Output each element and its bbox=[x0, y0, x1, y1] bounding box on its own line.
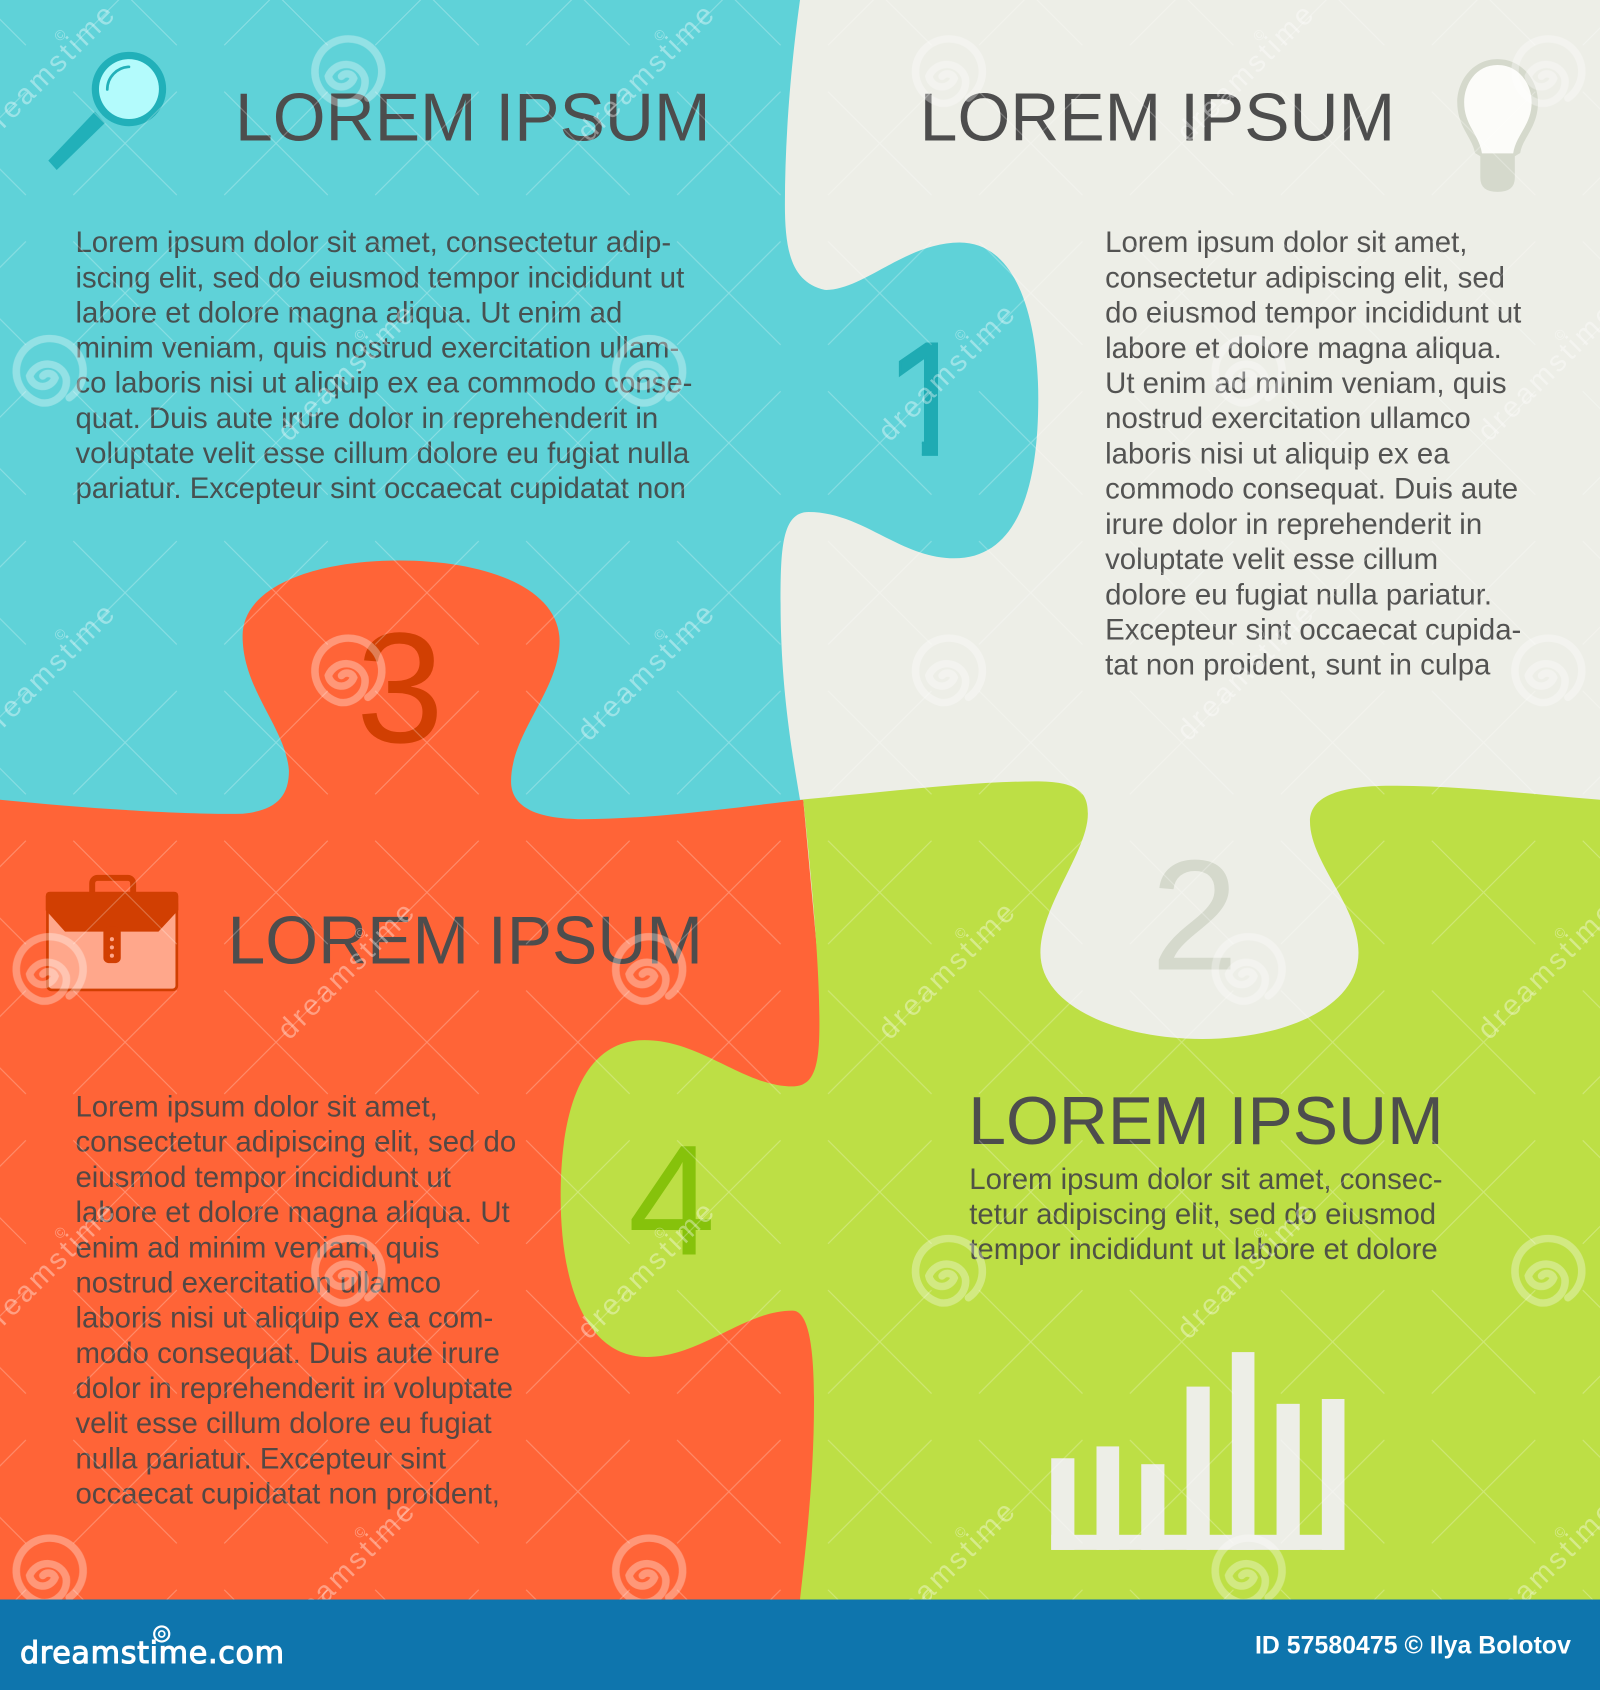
text block 2: dolore eu fugiat nulla pariatur. bbox=[1105, 578, 1492, 611]
text block 3: consectetur adipiscing elit, sed do bbox=[75, 1126, 516, 1159]
number 3: 3 bbox=[356, 601, 444, 776]
watermark overlay: dreamstime bbox=[1171, 1196, 1320, 1345]
watermark overlay: dreamstime bbox=[571, 598, 721, 747]
text block 4: tetur adipiscing elit, sed do eiusmod bbox=[969, 1198, 1436, 1231]
watermark overlay: dreamstime bbox=[1171, 598, 1320, 747]
watermark overlay: © bbox=[650, 625, 669, 644]
text block 4: tempor incididunt ut labore et dolore bbox=[969, 1233, 1438, 1266]
text block 3: laboris nisi ut aliquip ex ea com- bbox=[75, 1302, 493, 1335]
watermark overlay: © bbox=[51, 1223, 70, 1242]
icon: briefcase bbox=[46, 878, 178, 990]
watermark overlay: © bbox=[51, 25, 70, 44]
number 2: 2 bbox=[1151, 829, 1238, 1003]
icon: light bulb bbox=[1457, 59, 1538, 192]
panel: red piece 3 bbox=[0, 560, 825, 1599]
text block 1: voluptate velit esse cillum dolore eu fugiat nulla bbox=[75, 437, 690, 470]
watermark overlay: © bbox=[1550, 1522, 1569, 1541]
text block 2: laboris nisi ut aliquip ex ea bbox=[1105, 437, 1450, 470]
text block 4 bbox=[969, 1163, 1443, 1266]
text block 1: pariatur. Excepteur sint occaecat cupidatat non bbox=[75, 472, 686, 505]
text block 2: Lorem ipsum dolor sit amet, bbox=[1105, 226, 1467, 259]
text block 1: quat. Duis aute irure dolor in reprehenderit in bbox=[75, 402, 658, 435]
watermark overlay: dreamstime bbox=[272, 298, 421, 448]
watermark overlay: © bbox=[350, 325, 369, 344]
footer logo: dreamstime.com bbox=[20, 1636, 284, 1671]
watermark overlay: dreamstime bbox=[872, 897, 1021, 1046]
text block 3 bbox=[75, 1091, 516, 1511]
watermark overlay: dreamstime bbox=[872, 1496, 1021, 1645]
number 4: 4 bbox=[628, 1114, 715, 1289]
text block 2: consectetur adipiscing elit, sed bbox=[1105, 261, 1505, 294]
text block 2: commodo consequat. Duis aute bbox=[1105, 473, 1518, 506]
text block 2 bbox=[1105, 226, 1521, 682]
heading 1: LOREM IPSUM bbox=[235, 81, 711, 156]
number 1: 1 bbox=[884, 310, 974, 490]
text block 1 bbox=[75, 226, 692, 505]
text block 2: Ut enim ad minim veniam, quis bbox=[1105, 367, 1507, 400]
text block 2: nostrud exercitation ullamco bbox=[1105, 402, 1471, 435]
text block 3: dolor in reprehenderit in voluptate bbox=[75, 1372, 513, 1405]
heading 2: LOREM IPSUM bbox=[920, 81, 1395, 156]
watermark overlay: © bbox=[1250, 1223, 1269, 1242]
watermark overlay: dreamstime bbox=[571, 0, 721, 148]
watermark overlay: © bbox=[1250, 25, 1269, 44]
footer credit: ID 57580475 © Ilya Bolotov bbox=[1255, 1632, 1571, 1659]
panel: cream piece 2 bbox=[755, 0, 1600, 1051]
text block 1: Lorem ipsum dolor sit amet, consectetur adip- bbox=[75, 226, 671, 259]
text block 3: enim ad minim veniam, quis bbox=[75, 1231, 439, 1264]
watermark overlay: © bbox=[1550, 923, 1569, 942]
watermark overlay: dreamstime bbox=[272, 1496, 421, 1645]
watermark overlay: © bbox=[951, 923, 970, 942]
watermark overlay: © bbox=[650, 1223, 669, 1242]
text block 1: minim veniam, quis nostrud exercitation ullam- bbox=[75, 332, 679, 365]
text block 2: irure dolor in reprehenderit in bbox=[1105, 508, 1482, 541]
watermark overlay: © bbox=[951, 325, 970, 344]
watermark overlay: dreamstime bbox=[571, 1196, 721, 1345]
watermark overlay: © bbox=[650, 25, 669, 44]
watermark overlay: dreamstime bbox=[272, 897, 421, 1046]
footer bar bbox=[0, 1599, 1600, 1690]
watermark overlay: © bbox=[1250, 625, 1269, 644]
text block 2: do eiusmod tempor incididunt ut bbox=[1105, 297, 1521, 330]
text block 2: Excepteur sint occaecat cupida- bbox=[1105, 613, 1521, 646]
icon: magnifying glass bbox=[48, 52, 166, 170]
watermark overlay: © bbox=[350, 923, 369, 942]
watermark overlay: dreamstime bbox=[1171, 0, 1320, 148]
text block 3: occaecat cupidatat non proident, bbox=[75, 1478, 500, 1511]
watermark overlay: © bbox=[951, 1522, 970, 1541]
panel: blue piece 1 bbox=[0, 0, 1038, 819]
text block 3: eiusmod tempor incididunt ut bbox=[75, 1161, 451, 1194]
watermark overlay: © bbox=[1550, 325, 1569, 344]
icon: bar chart bbox=[1051, 1352, 1344, 1550]
text block 2: tat non proident, sunt in culpa bbox=[1105, 649, 1491, 682]
text block 2: voluptate velit esse cillum bbox=[1105, 543, 1438, 576]
text block 3: modo consequat. Duis aute irure bbox=[75, 1337, 500, 1370]
watermark overlay: © bbox=[350, 1522, 369, 1541]
text block 3: nostrud exercitation ullamco bbox=[75, 1267, 441, 1300]
watermark overlay: © bbox=[51, 625, 70, 644]
watermark overlay: dreamstime bbox=[872, 298, 1021, 448]
text block 2: labore et dolore magna aliqua. bbox=[1105, 332, 1502, 365]
heading 4: LOREM IPSUM bbox=[968, 1084, 1444, 1159]
text block 1: co laboris nisi ut aliquip ex ea commodo conse- bbox=[75, 367, 692, 400]
text block 1: iscing elit, sed do eiusmod tempor incididunt ut bbox=[75, 261, 684, 294]
text block 4: Lorem ipsum dolor sit amet, consec- bbox=[969, 1163, 1443, 1196]
text block 1: labore et dolore magna aliqua. Ut enim ad bbox=[75, 296, 622, 329]
text block 3: labore et dolore magna aliqua. Ut bbox=[75, 1196, 510, 1229]
heading 3: LOREM IPSUM bbox=[227, 904, 703, 979]
text block 3: velit esse cillum dolore eu fugiat bbox=[75, 1407, 492, 1440]
panel: green piece 4 bbox=[561, 781, 1600, 1599]
text block 3: Lorem ipsum dolor sit amet, bbox=[75, 1091, 438, 1124]
text block 3: nulla pariatur. Excepteur sint bbox=[75, 1442, 446, 1475]
